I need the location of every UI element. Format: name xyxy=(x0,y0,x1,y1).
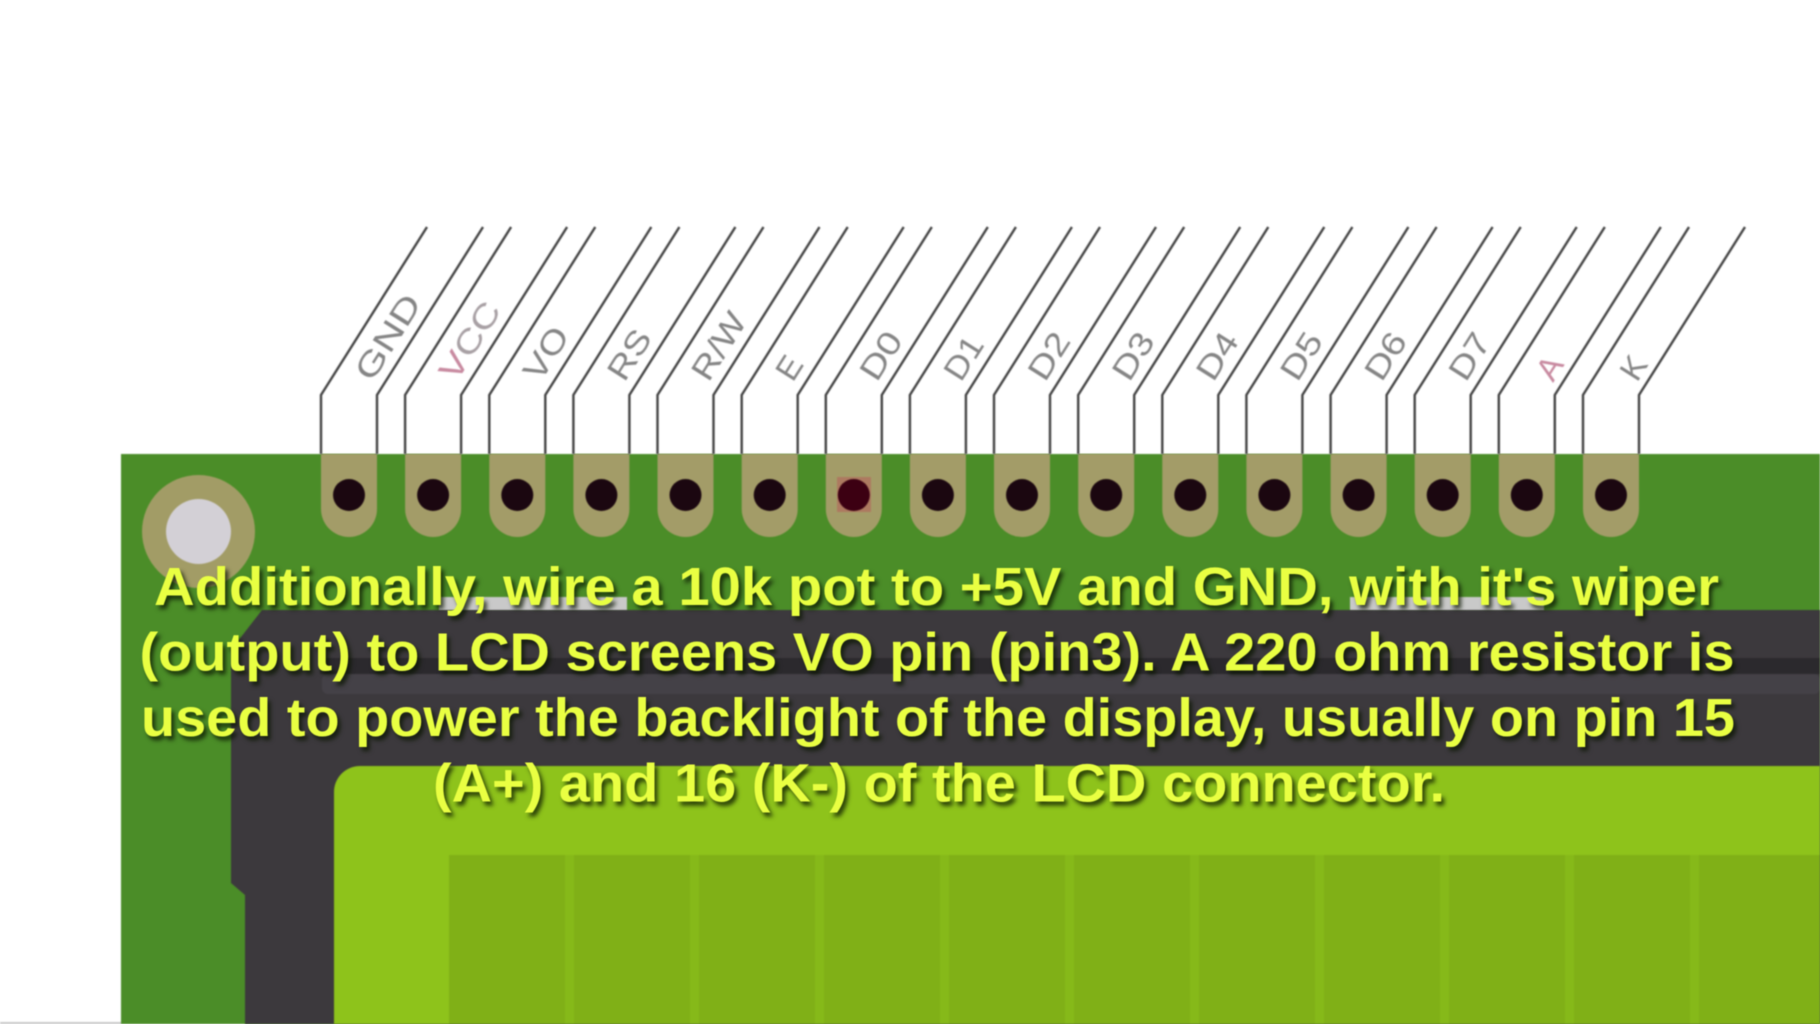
pin labels: RS xyxy=(600,322,659,387)
panel: LCD screen xyxy=(334,766,1820,1024)
panel: display bezel xyxy=(231,610,1820,1024)
pin label outlines xyxy=(321,227,1745,454)
pin labels: D0 xyxy=(852,324,910,387)
pin labels: D7 xyxy=(1441,326,1498,387)
pin labels: K xyxy=(1612,348,1655,387)
pin labels: D2 xyxy=(1021,325,1078,387)
connector highlight right xyxy=(1350,597,1544,611)
caption text: (output) to LCD screens VO pin (pin3). A 220 ohm resistor is xyxy=(140,622,1734,682)
pin labels: GND xyxy=(348,288,429,387)
pin labels: D4 xyxy=(1189,325,1246,387)
pin labels: VCC xyxy=(432,295,508,387)
caption text: (A+) and 16 (K-) of the LCD connector. xyxy=(433,754,1445,814)
connector highlight left xyxy=(439,597,627,611)
pin labels: D6 xyxy=(1357,325,1414,387)
pin labels: D1 xyxy=(937,329,992,387)
pin labels: D3 xyxy=(1105,325,1162,387)
pin labels: D5 xyxy=(1273,325,1330,387)
panel: LCD circuit board xyxy=(0,454,1820,1024)
pin labels: A xyxy=(1528,348,1571,387)
pin labels: R/W xyxy=(684,305,754,387)
pin labels: VO xyxy=(516,320,577,387)
mounting hole xyxy=(142,475,255,588)
pin labels xyxy=(348,288,1655,387)
character cells xyxy=(449,855,1820,1024)
pin solder pads xyxy=(321,454,1639,537)
caption text: used to power the backlight of the display, usually on pin 15 xyxy=(141,688,1735,748)
caption text xyxy=(140,557,1735,814)
pin labels: E xyxy=(768,349,810,387)
caption text: Additionally, wire a 10k pot to +5V and GND, with it's wiper xyxy=(154,557,1719,617)
